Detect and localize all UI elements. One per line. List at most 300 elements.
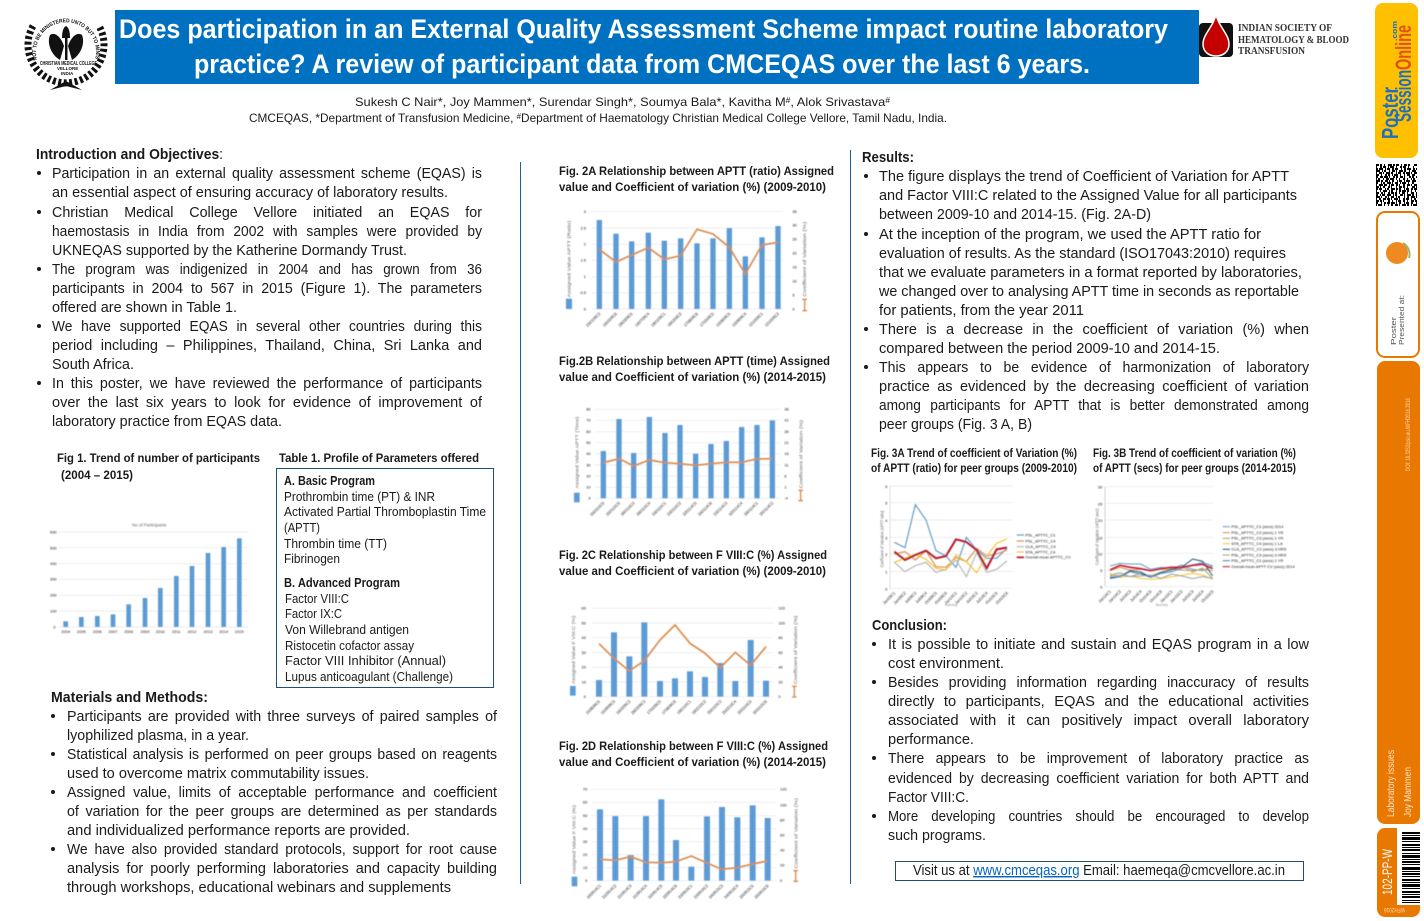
panel: materials and methods: through workshops, educational webinars and supplements bbox=[67, 880, 451, 896]
chart: figure 2B: 320114C5 bbox=[681, 500, 698, 517]
chart: figure 2C: 50 bbox=[582, 620, 587, 625]
panel: introduction and objectives: offered are shown in Table 1. bbox=[52, 300, 237, 316]
line chart: figure 3B: Jan14C2 bbox=[1107, 588, 1123, 604]
panel: introduction and objectives: The program was indigenized in 2004 and has grown from 36 bbox=[52, 262, 482, 278]
panel: results: that we evaluate parameters in a format reported by laboratories, bbox=[879, 265, 1302, 281]
line chart: figure 3A: 5 bbox=[885, 501, 888, 506]
authors and affiliations: Department of Haematology Christian Medical College Vellore, Tamil Nadu, India. bbox=[521, 111, 947, 125]
panel: results bbox=[862, 149, 1310, 433]
sidebar: orange info strip bbox=[1377, 361, 1420, 824]
line chart: figure 3A: Jul09C3 bbox=[903, 590, 918, 604]
panel: results: evaluation of results. As the standard (ISO17043:2010) requires bbox=[879, 246, 1286, 262]
panel: table 1 profile of parameters: Factor IX:C bbox=[285, 607, 342, 621]
panel: results: for patients, from the year 2011 bbox=[879, 303, 1084, 319]
line chart: figure 3B: CLA_APTTC_C1 (secs) 3 HRS bbox=[1231, 547, 1287, 552]
line chart: figure 3B: Oct15C5 bbox=[1200, 588, 1215, 603]
chart: figure 2B: 330114C3 bbox=[712, 500, 729, 517]
bar chart: number of participants: 200 bbox=[50, 593, 57, 598]
panel: introduction and objectives: participants in 2004 to 567 in 2015 (Figure 1). The parameters bbox=[52, 281, 482, 297]
line chart: figure 3B: 0 bbox=[1100, 585, 1103, 590]
figure 2C heading: Fig. 2C Relationship between F VIII:C (%) Assigned bbox=[559, 548, 827, 562]
chart: figure 2C: 0 bbox=[778, 694, 781, 699]
chart: figure 2C: 100 bbox=[778, 620, 786, 625]
line chart: figure 3A: Jul09C4 bbox=[914, 590, 929, 604]
authors and affiliations: # bbox=[786, 96, 791, 105]
chart: figure 2D: Assigned Value F VIII:C (%) bbox=[571, 804, 576, 874]
panel: table 1 profile of parameters: A. Basic Program bbox=[284, 474, 375, 488]
line chart: figure 3B: PSL_APTTC_C1 (secs) 2014 bbox=[1231, 524, 1284, 529]
logo: Indian Society of Hematology & Blood Transfusion: HEMATOLOGY & BLOOD bbox=[1238, 35, 1349, 46]
chart: figure 2D: 310914C2 bbox=[601, 883, 618, 900]
chart: figure 2C: 150809C5 bbox=[585, 698, 602, 715]
logo: Christian Medical College seal: CHRISTIAN MEDICAL COLLEGE bbox=[40, 61, 97, 67]
chart: figure 2D: 0 bbox=[585, 878, 588, 883]
sidebar: PosterSessionOnline logo: Online bbox=[1391, 25, 1416, 70]
panel: introduction and objectives: over the last six years to look for evidence of improvement of bbox=[52, 395, 483, 411]
logo: Indian Society of Hematology & Blood Transfusion: TRANSFUSION bbox=[1238, 46, 1305, 57]
chart: figure 2B: 40 bbox=[586, 451, 591, 456]
chart: figure 2A: 280309C5 bbox=[617, 311, 634, 328]
line chart: figure 3A: Jul10C4 bbox=[975, 590, 989, 604]
chart: figure 2D: 350915C6 bbox=[753, 883, 770, 900]
panel: conclusion: More developing countries should be encouraged to develop bbox=[888, 809, 1309, 825]
figure 3A heading: of APTT (ratio) for peer groups (2009-2010) bbox=[871, 461, 1077, 475]
panel: conclusion: cost environment. bbox=[888, 656, 1004, 672]
chart: figure 2A: 10 bbox=[792, 279, 798, 284]
panel: conclusion: associated with it can positively impact overall laboratory bbox=[888, 713, 1310, 729]
panel: introduction and objectives: laboratory practice from EQAS data. bbox=[52, 414, 282, 430]
panel: table 1 profile of parameters: Ristocetin cofactor assay bbox=[285, 639, 415, 653]
chart: figure 2B: 350114C6 bbox=[697, 500, 714, 517]
sidebar: PosterSessionOnline logo: Session bbox=[1391, 70, 1416, 122]
bar chart: number of participants: 0 bbox=[53, 624, 56, 629]
line chart: figure 3B: STA_APTTC_C4 (secs) 1 LA bbox=[1231, 541, 1283, 546]
panel: results: The figure displays the trend of Coefficient of Variation for APTT bbox=[879, 169, 1289, 185]
panel: table 1 profile of parameters: Prothrombin time (PT) & INR bbox=[284, 490, 435, 504]
line chart: figure 3A: Coefficient of Variation (APTT ratio) bbox=[879, 510, 884, 567]
line chart: figure 3B: 10 bbox=[1098, 551, 1103, 556]
chart: figure 2C: 40 bbox=[582, 635, 587, 640]
chart: figure 2C: 180110C1 bbox=[676, 698, 693, 715]
chart: figure 2B: 0 bbox=[588, 496, 591, 501]
sidebar: PosterSessionOnline logo: Poster bbox=[1377, 87, 1403, 139]
panel: results: This appears to be evidence of harmonization of laboratory bbox=[879, 360, 1310, 376]
panel: conclusion: There appears to be improvement of laboratory practice as bbox=[888, 751, 1309, 767]
panel: introduction and objectives: South Africa. bbox=[52, 357, 134, 373]
line chart: figure 3A: Jan10C1 bbox=[943, 590, 959, 605]
bar chart: number of participants: 500 bbox=[50, 545, 57, 550]
chart: figure 2D: 120 bbox=[780, 787, 787, 792]
panel: results: among participants for APTT that is better demonstrated among bbox=[879, 398, 1309, 414]
chart: figure 2C: 170309C5 bbox=[645, 698, 663, 715]
bar chart: number of participants: 300 bbox=[50, 577, 57, 582]
figure 2C heading bbox=[559, 548, 827, 578]
chart: figure 2C: 20 bbox=[778, 679, 784, 684]
figure 2A heading bbox=[559, 164, 834, 194]
chart: figure 2A: 160309C6 bbox=[602, 311, 619, 328]
bar chart: number of participants: 2010 bbox=[156, 629, 166, 634]
panel: introduction and objectives: UKNEQAS supported by the Katherine Dormandy Trust. bbox=[52, 243, 407, 259]
line chart: figure 3A: 3 bbox=[885, 535, 888, 540]
panel: table 1 profile of parameters: Von Willebrand antigen bbox=[285, 623, 409, 637]
chart: figure 2B: Assigned Value APTT (Time) bbox=[574, 416, 579, 488]
figure 1 heading bbox=[57, 451, 260, 482]
panel: conclusion bbox=[872, 617, 1310, 844]
chart: figure 2B bbox=[574, 407, 803, 517]
chart: figure 2A: 180209C2 bbox=[666, 311, 683, 328]
figure 1 heading: Fig 1. Trend of number of participants bbox=[57, 451, 260, 465]
sidebar: QR code bbox=[1376, 165, 1417, 205]
bar chart: number of participants: 2014 bbox=[219, 629, 229, 634]
sidebar: poster code and barcode bbox=[1377, 826, 1421, 917]
line chart: figure 3B: Jul15C3 bbox=[1181, 588, 1195, 603]
panel: table 1 profile of parameters bbox=[276, 451, 494, 688]
bar chart: number of participants: 600 bbox=[50, 529, 57, 534]
chart: figure 2D: 80 bbox=[780, 817, 785, 822]
chart: figure 2A: 151009C1 bbox=[747, 311, 765, 328]
sidebar: poster code and barcode: 102-PP-W bbox=[1379, 848, 1395, 895]
title banner: practice? A review of participant data from CMCEQAS over the last 6 years. bbox=[194, 49, 1090, 79]
sidebar: PosterSessionOnline logo: .com bbox=[1392, 21, 1399, 41]
panel: results: peer groups (Fig. 3 A, B) bbox=[879, 417, 1032, 433]
line chart: figure 3A: 2 bbox=[885, 552, 888, 557]
figure 2A heading: value and Coefficient of variation (%) (2009-2010) bbox=[559, 180, 826, 194]
chart: figure 2C: 80 bbox=[778, 635, 784, 640]
chart: figure 2C: 20 bbox=[582, 665, 587, 670]
figure 3B heading: of APTT (secs) for peer groups (2014-2015) bbox=[1093, 461, 1296, 475]
panel: materials and methods: Statistical analysis is performed on peer groups based on reagents bbox=[67, 747, 497, 763]
chart: figure 2D: 40 bbox=[780, 848, 785, 853]
chart: figure 2D: 310914C4 bbox=[631, 883, 649, 900]
chart: figure 2B: Coefficient of Variation (%) bbox=[798, 419, 803, 488]
logo: Christian Medical College seal: VELLORE bbox=[57, 66, 78, 71]
chart: figure 2A: 20 bbox=[792, 251, 798, 256]
chart: figure 2B: 1 bbox=[784, 485, 787, 490]
chart: figure 2B: 36 bbox=[784, 407, 790, 412]
line chart: figure 3A: Jan09C2 bbox=[892, 590, 908, 605]
chart: figure 2D: 320914C6 bbox=[661, 883, 679, 900]
chart: figure 2A: Assigned Value APTT (Ratio) bbox=[567, 220, 572, 297]
sidebar: presented-at panel: Presented at: bbox=[1399, 295, 1406, 345]
panel: introduction and objectives: Introduction and Objectives: bbox=[36, 146, 223, 163]
bar chart: number of participants: 2011 bbox=[172, 629, 181, 634]
chart: figure 2C: 170809C6 bbox=[660, 698, 678, 715]
authors and affiliations bbox=[249, 95, 947, 125]
chart: figure 2C: Coefficient of Variation (%) bbox=[793, 615, 798, 684]
panel: materials and methods: and individualized performance reports are provided. bbox=[67, 823, 410, 839]
chart: figure 2A: 30 bbox=[792, 223, 798, 228]
authors and affiliations: , Alok Srivastava bbox=[790, 95, 886, 109]
panel: materials and methods: Materials and Methods: bbox=[51, 689, 208, 706]
chart: figure 2B: 350115C6 bbox=[605, 500, 622, 517]
panel: introduction and objectives: period including – Philippines, Thailand, China, Sri Lanka and bbox=[52, 338, 482, 354]
chart: figure 2D: 350915C5 bbox=[738, 883, 755, 900]
chart: figure 2D: 20 bbox=[780, 863, 785, 868]
chart: figure 2D: 60 bbox=[780, 832, 785, 837]
chart: figure 2B: 70 bbox=[586, 418, 591, 423]
authors and affiliations: # bbox=[517, 112, 522, 121]
chart: figure 2D: 330915C1 bbox=[677, 883, 694, 900]
bar chart: number of participants: 2007 bbox=[109, 629, 118, 634]
chart: figure 2D: 300914C1 bbox=[586, 883, 603, 900]
chart: figure 2B: 11 bbox=[784, 462, 789, 467]
line chart: figure 3B: PSL_APTTC_C1 (secs) 1 YR bbox=[1231, 558, 1283, 563]
line chart: figure 3B: 30 bbox=[1098, 485, 1103, 490]
chart: figure 2A: 15 bbox=[792, 265, 798, 270]
line chart: figure 3A: STA_APTTC_C4 bbox=[1025, 549, 1056, 554]
sidebar: poster code and barcode: WFH2016 bbox=[1383, 906, 1405, 912]
chart: figure 2A: 160709C4 bbox=[634, 311, 651, 328]
chart: figure 2B: 60 bbox=[586, 429, 591, 434]
line chart: figure 3B: Oct14C5 bbox=[1138, 588, 1153, 603]
panel: results: practice as evidenced by the decreasing coefficient of variation bbox=[879, 379, 1309, 395]
chart: figure 2B: 6 bbox=[784, 473, 787, 478]
chart: figure 2D: 330915C2 bbox=[692, 883, 710, 900]
line chart: figure 3B: Jul14C3 bbox=[1118, 588, 1133, 603]
line chart: figure 3B: Oct14C6 bbox=[1148, 588, 1164, 603]
line chart: figure 3B: Jul15C4 bbox=[1191, 588, 1205, 603]
line chart: figure 3A bbox=[879, 484, 1071, 607]
chart: figure 2A: 3 bbox=[584, 209, 587, 214]
line chart: figure 3B: 15 bbox=[1098, 535, 1103, 540]
authors and affiliations: CMCEQAS, *Department of Transfusion Medicine, bbox=[249, 111, 517, 125]
panel: materials and methods: Assigned value, limits of acceptable performance and coefficient bbox=[67, 785, 497, 801]
chart: figure 2C: 120 bbox=[778, 606, 786, 611]
panel: table 1 profile of parameters: Thrombin time (TT) bbox=[284, 537, 387, 551]
panel: table 1 profile of parameters: Activated Partial Thromboplastin Time bbox=[284, 505, 486, 519]
bar chart: number of participants: 400 bbox=[50, 561, 57, 566]
line chart: figure 3B: 20 bbox=[1098, 518, 1103, 523]
panel: table 1 profile of parameters: Table 1. Profile of Parameters offered bbox=[279, 451, 479, 465]
line chart: figure 3B: 25 bbox=[1098, 501, 1103, 506]
line chart: figure 3A: CLA_APTTC_C4 bbox=[1025, 544, 1056, 549]
panel: materials and methods: of variation for the peer groups are determined as per standards bbox=[67, 804, 497, 820]
chart: figure 2D: 40 bbox=[583, 826, 588, 831]
chart: figure 2C bbox=[570, 606, 798, 715]
chart: figure 2C: 40 bbox=[778, 665, 784, 670]
bar chart: number of participants: 2013 bbox=[204, 629, 213, 634]
chart: figure 2A: 1.5 bbox=[580, 258, 587, 263]
chart: figure 2D: 340915C3 bbox=[707, 883, 725, 900]
line chart: figure 3A: PSL_APTTC_C4 bbox=[1025, 538, 1056, 543]
chart: figure 2D bbox=[571, 787, 799, 900]
line chart: figure 3A: 0 bbox=[885, 586, 888, 591]
sidebar: orange info strip: Laboratory issues bbox=[1386, 750, 1397, 817]
chart: figure 2A: 150809C5 bbox=[715, 311, 732, 328]
chart: figure 2B: 330115C2 bbox=[666, 500, 683, 517]
figure 2B heading bbox=[559, 354, 830, 384]
title banner bbox=[115, 10, 1199, 84]
chart: figure 2D: Coefficient of Variation (%) bbox=[794, 797, 799, 869]
chart: figure 2B: 330115C1 bbox=[651, 500, 668, 517]
chart: figure 2C: 300310C6 bbox=[751, 698, 769, 715]
line chart: figure 3A: 4 bbox=[885, 518, 888, 523]
bar chart: number of participants: 2009 bbox=[141, 629, 150, 634]
chart: figure 2D: 60 bbox=[583, 800, 588, 805]
bar chart: number of participants bbox=[50, 523, 248, 634]
panel: introduction and objectives: We have supported EQAS in several other countries during this bbox=[52, 319, 482, 335]
panel: introduction and objectives: Participation in an external quality assessment scheme (EQAS) is bbox=[52, 166, 482, 182]
figure 2D heading: value and Coefficient of variation (%) (2014-2015) bbox=[559, 755, 826, 769]
panel: materials and methods: lyophilized plasma, in a year. bbox=[67, 728, 249, 744]
chart: figure 2C: 60 bbox=[582, 606, 587, 611]
line chart: figure 3B: Jul14C4 bbox=[1129, 588, 1143, 603]
chart: figure 2A: 2 bbox=[584, 242, 587, 247]
bar chart: number of participants: 2004 bbox=[61, 629, 71, 634]
panel: conclusion: Conclusion: bbox=[872, 617, 947, 634]
sidebar: PosterSessionOnline logo bbox=[1375, 3, 1418, 158]
chart: figure 2A: Coefficient of Variation (%) bbox=[802, 221, 807, 297]
chart: figure 2A: 2.5 bbox=[580, 225, 587, 230]
sidebar: orange info strip: Joy Mammen bbox=[1403, 767, 1414, 817]
chart: figure 2A: 250109C3 bbox=[585, 311, 602, 328]
line chart: figure 3A: Survey bbox=[945, 602, 957, 607]
figure 2C heading: value and Coefficient of variation (%) (2009-2010) bbox=[559, 564, 826, 578]
panel: table 1 profile of parameters: Factor VIII:C bbox=[285, 592, 349, 606]
line chart: figure 3B: Jan15C1 bbox=[1159, 588, 1174, 604]
figure 2D heading: Fig. 2D Relationship between F VIII:C (%) Assigned bbox=[559, 739, 828, 753]
panel: materials and methods bbox=[51, 689, 498, 896]
chart: figure 2B: 360115C4 bbox=[635, 500, 652, 517]
chart: figure 2B: 10 bbox=[586, 485, 591, 490]
chart: figure 2A: 5 bbox=[792, 292, 795, 297]
sidebar: presented-at panel bbox=[1377, 212, 1419, 357]
chart: figure 2B: 21 bbox=[784, 440, 790, 445]
chart: figure 2C: 0 bbox=[584, 694, 587, 699]
logo: Christian Medical College seal bbox=[24, 18, 108, 90]
line chart: figure 3A: Jan09C1 bbox=[882, 590, 897, 605]
logo: Christian Medical College seal: INDIA bbox=[61, 71, 74, 76]
figure 3B heading bbox=[1093, 446, 1296, 475]
panel: table 1 profile of parameters: Lupus anticoagulant (Challenge) bbox=[285, 670, 453, 684]
authors and affiliations: # bbox=[885, 96, 891, 105]
figure 3B heading: Fig. 3B Trend of coefficient of variation (%) bbox=[1093, 446, 1296, 460]
contact box: Visit us at www.cmceqas.org Email: haemeqa@cmcvellore.ac.in bbox=[913, 863, 1285, 879]
chart: figure 2C: 160309C3 bbox=[615, 698, 632, 715]
chart: figure 2C: 250210C4 bbox=[721, 698, 738, 715]
panel: results: and Factor VIII:C related to the Assigned Value for all participants bbox=[879, 188, 1297, 204]
panel: table 1 profile of parameters: Fibrinogen bbox=[284, 552, 340, 566]
authors and affiliations: Sukesh C Nair*, Joy Mammen*, Surendar Singh*, Soumya Bala*, Kavitha M bbox=[355, 95, 758, 109]
panel: introduction and objectives bbox=[36, 146, 483, 430]
panel: results: At the inception of the program, we used the APTT ratio for bbox=[879, 227, 1261, 243]
chart: figure 2B: 20 bbox=[586, 473, 591, 478]
chart: figure 2A: 151009C2 bbox=[763, 311, 781, 328]
line chart: figure 3A: Jan10C2 bbox=[954, 590, 969, 605]
panel: results: compared between the period 2009-10 and 2014-15. bbox=[879, 341, 1220, 357]
logo: Indian Society of Hematology & Blood Transfusion bbox=[1199, 14, 1349, 57]
bar chart: number of participants: 2008 bbox=[124, 629, 134, 634]
chart: figure 2A: 0 bbox=[584, 306, 587, 311]
chart: figure 2C: Assigned Value F VIII:C (%) bbox=[571, 615, 576, 684]
chart: figure 2B: 350114C2 bbox=[758, 500, 775, 517]
chart: figure 2A: 25 bbox=[792, 237, 798, 242]
chart: figure 2C: 280309C3 bbox=[630, 698, 647, 715]
line chart: figure 3A: Jul10C3 bbox=[965, 590, 979, 604]
chart: figure 2B: 30 bbox=[586, 462, 591, 467]
chart: figure 2B: 80 bbox=[586, 407, 591, 412]
panel: results: Results: bbox=[862, 149, 914, 166]
panel: conclusion: performance. bbox=[888, 732, 974, 748]
line chart: figure 3B: Overall mean APTT CV (secs) 2014 bbox=[1231, 564, 1295, 569]
chart: figure 2B: 320114C4 bbox=[727, 500, 744, 517]
panel: results: There is a decrease in the coefficient of variation (%) when bbox=[879, 322, 1309, 338]
bar chart: number of participants: 2012 bbox=[188, 629, 197, 634]
panel: table 1 profile of parameters: B. Advanced Program bbox=[284, 576, 400, 590]
chart: figure 2C: 150909C3 bbox=[600, 698, 617, 715]
chart: figure 2D: 340915C4 bbox=[723, 883, 740, 900]
line chart: figure 3B: 5 bbox=[1100, 568, 1103, 573]
bar chart: number of participants: 100 bbox=[50, 608, 57, 613]
panel: results: between 2009-10 and 2014-15. (Fig. 2A-D) bbox=[879, 207, 1151, 223]
chart: figure 2D: 100 bbox=[780, 802, 787, 807]
chart: figure 2B: 360114C1 bbox=[743, 500, 760, 517]
line chart: figure 3B: PSL_APTTC_C2 (secs) 1 YR bbox=[1231, 530, 1283, 535]
panel: materials and methods: We have also provided standard protocols, support for root cause bbox=[67, 842, 497, 858]
line chart: figure 3B: Jan14C1 bbox=[1097, 588, 1113, 604]
panel: results: we changed over to analysing APTT time in seconds as reportable bbox=[878, 284, 1299, 300]
chart: figure 2C: 250110C3 bbox=[706, 698, 723, 715]
line chart: figure 3B: PSL_APTTC_C3 (secs) 1 YR bbox=[1231, 536, 1283, 541]
chart: figure 2D: 320914C5 bbox=[647, 883, 664, 900]
line chart: figure 3A: 6 bbox=[885, 484, 888, 489]
panel: conclusion: evidenced by decreasing coefficient variation for both APTT and bbox=[888, 771, 1309, 787]
chart: figure 2D: 20 bbox=[583, 852, 588, 857]
line chart: figure 3A: Oct09C5 bbox=[923, 590, 939, 605]
chart: figure 2D: 0 bbox=[780, 878, 783, 883]
bar chart: number of participants: No of Participants bbox=[132, 523, 166, 528]
chart: figure 2A: 0 bbox=[792, 306, 795, 311]
line chart: figure 3A: PSL_APTTC_C1 bbox=[1025, 532, 1056, 537]
panel: conclusion: directly to participants, EQAS and the educational activities bbox=[888, 694, 1309, 710]
panel: materials and methods: analysis for poorly performing laboratories and capacity building bbox=[67, 861, 497, 877]
bar chart: number of participants: 2015 bbox=[235, 629, 245, 634]
line chart: figure 3A: Overall mean APTTC_CV bbox=[1025, 555, 1071, 560]
line chart: figure 3B bbox=[1094, 485, 1295, 607]
chart: figure 2B: 26 bbox=[784, 429, 790, 434]
chart: figure 2D: 310914C3 bbox=[616, 883, 633, 900]
panel: introduction and objectives: Christian Medical College Vellore initiated an EQAS for bbox=[52, 205, 482, 221]
chart: figure 2C: 200310C5 bbox=[736, 698, 753, 715]
line chart: figure 3A: Oct09C6 bbox=[933, 590, 949, 605]
panel: introduction and objectives: an essential aspect of ensuring accuracy of laboratory results. bbox=[52, 185, 448, 201]
chart: figure 2C: 10 bbox=[582, 679, 587, 684]
figure 3A heading: Fig. 3A Trend of coefficient of Variation (%) bbox=[871, 446, 1077, 460]
line chart: figure 3B: Jan15C2 bbox=[1169, 588, 1184, 604]
sidebar: presented-at panel: Poster bbox=[1391, 316, 1398, 345]
chart: figure 2B: -4 bbox=[784, 496, 789, 501]
chart: figure 2D: 10 bbox=[583, 865, 588, 870]
line chart: figure 3B: Coefficient of Variation (APTT secs) bbox=[1094, 508, 1099, 565]
figure 1 heading: (2004 – 2015) bbox=[61, 468, 133, 482]
chart: figure 2D: 70 bbox=[583, 787, 588, 792]
line chart: figure 3A: Oct10C5 bbox=[984, 590, 999, 605]
figure 2A heading: Fig. 2A Relationship between APTT (ratio) Assigned bbox=[559, 164, 834, 178]
line chart: figure 3B: Survey bbox=[1155, 602, 1168, 607]
logo: Indian Society of Hematology & Blood Transfusion: INDIAN SOCIETY OF bbox=[1238, 23, 1332, 34]
line chart: figure 3A: 1 bbox=[885, 569, 888, 574]
chart: figure 2D: 50 bbox=[583, 813, 588, 818]
chart: figure 2A: 170809C6 bbox=[682, 311, 700, 328]
bar chart: number of participants: 2006 bbox=[93, 629, 103, 634]
panel: table 1 profile of parameters: (APTT) bbox=[284, 521, 320, 535]
chart: figure 2A: 1 bbox=[584, 274, 587, 279]
figure 2B heading: Fig.2B Relationship between APTT (time) Assigned bbox=[559, 354, 830, 368]
panel: conclusion: such programs. bbox=[888, 828, 986, 844]
panel: introduction and objectives: In this poster, we have reviewed the performance of participants bbox=[52, 376, 482, 392]
panel: table 1 profile of parameters: Factor VIII Inhibitor (Annual) bbox=[285, 654, 446, 668]
panel: conclusion: Besides providing information regarding inaccuracy of results bbox=[888, 675, 1309, 691]
